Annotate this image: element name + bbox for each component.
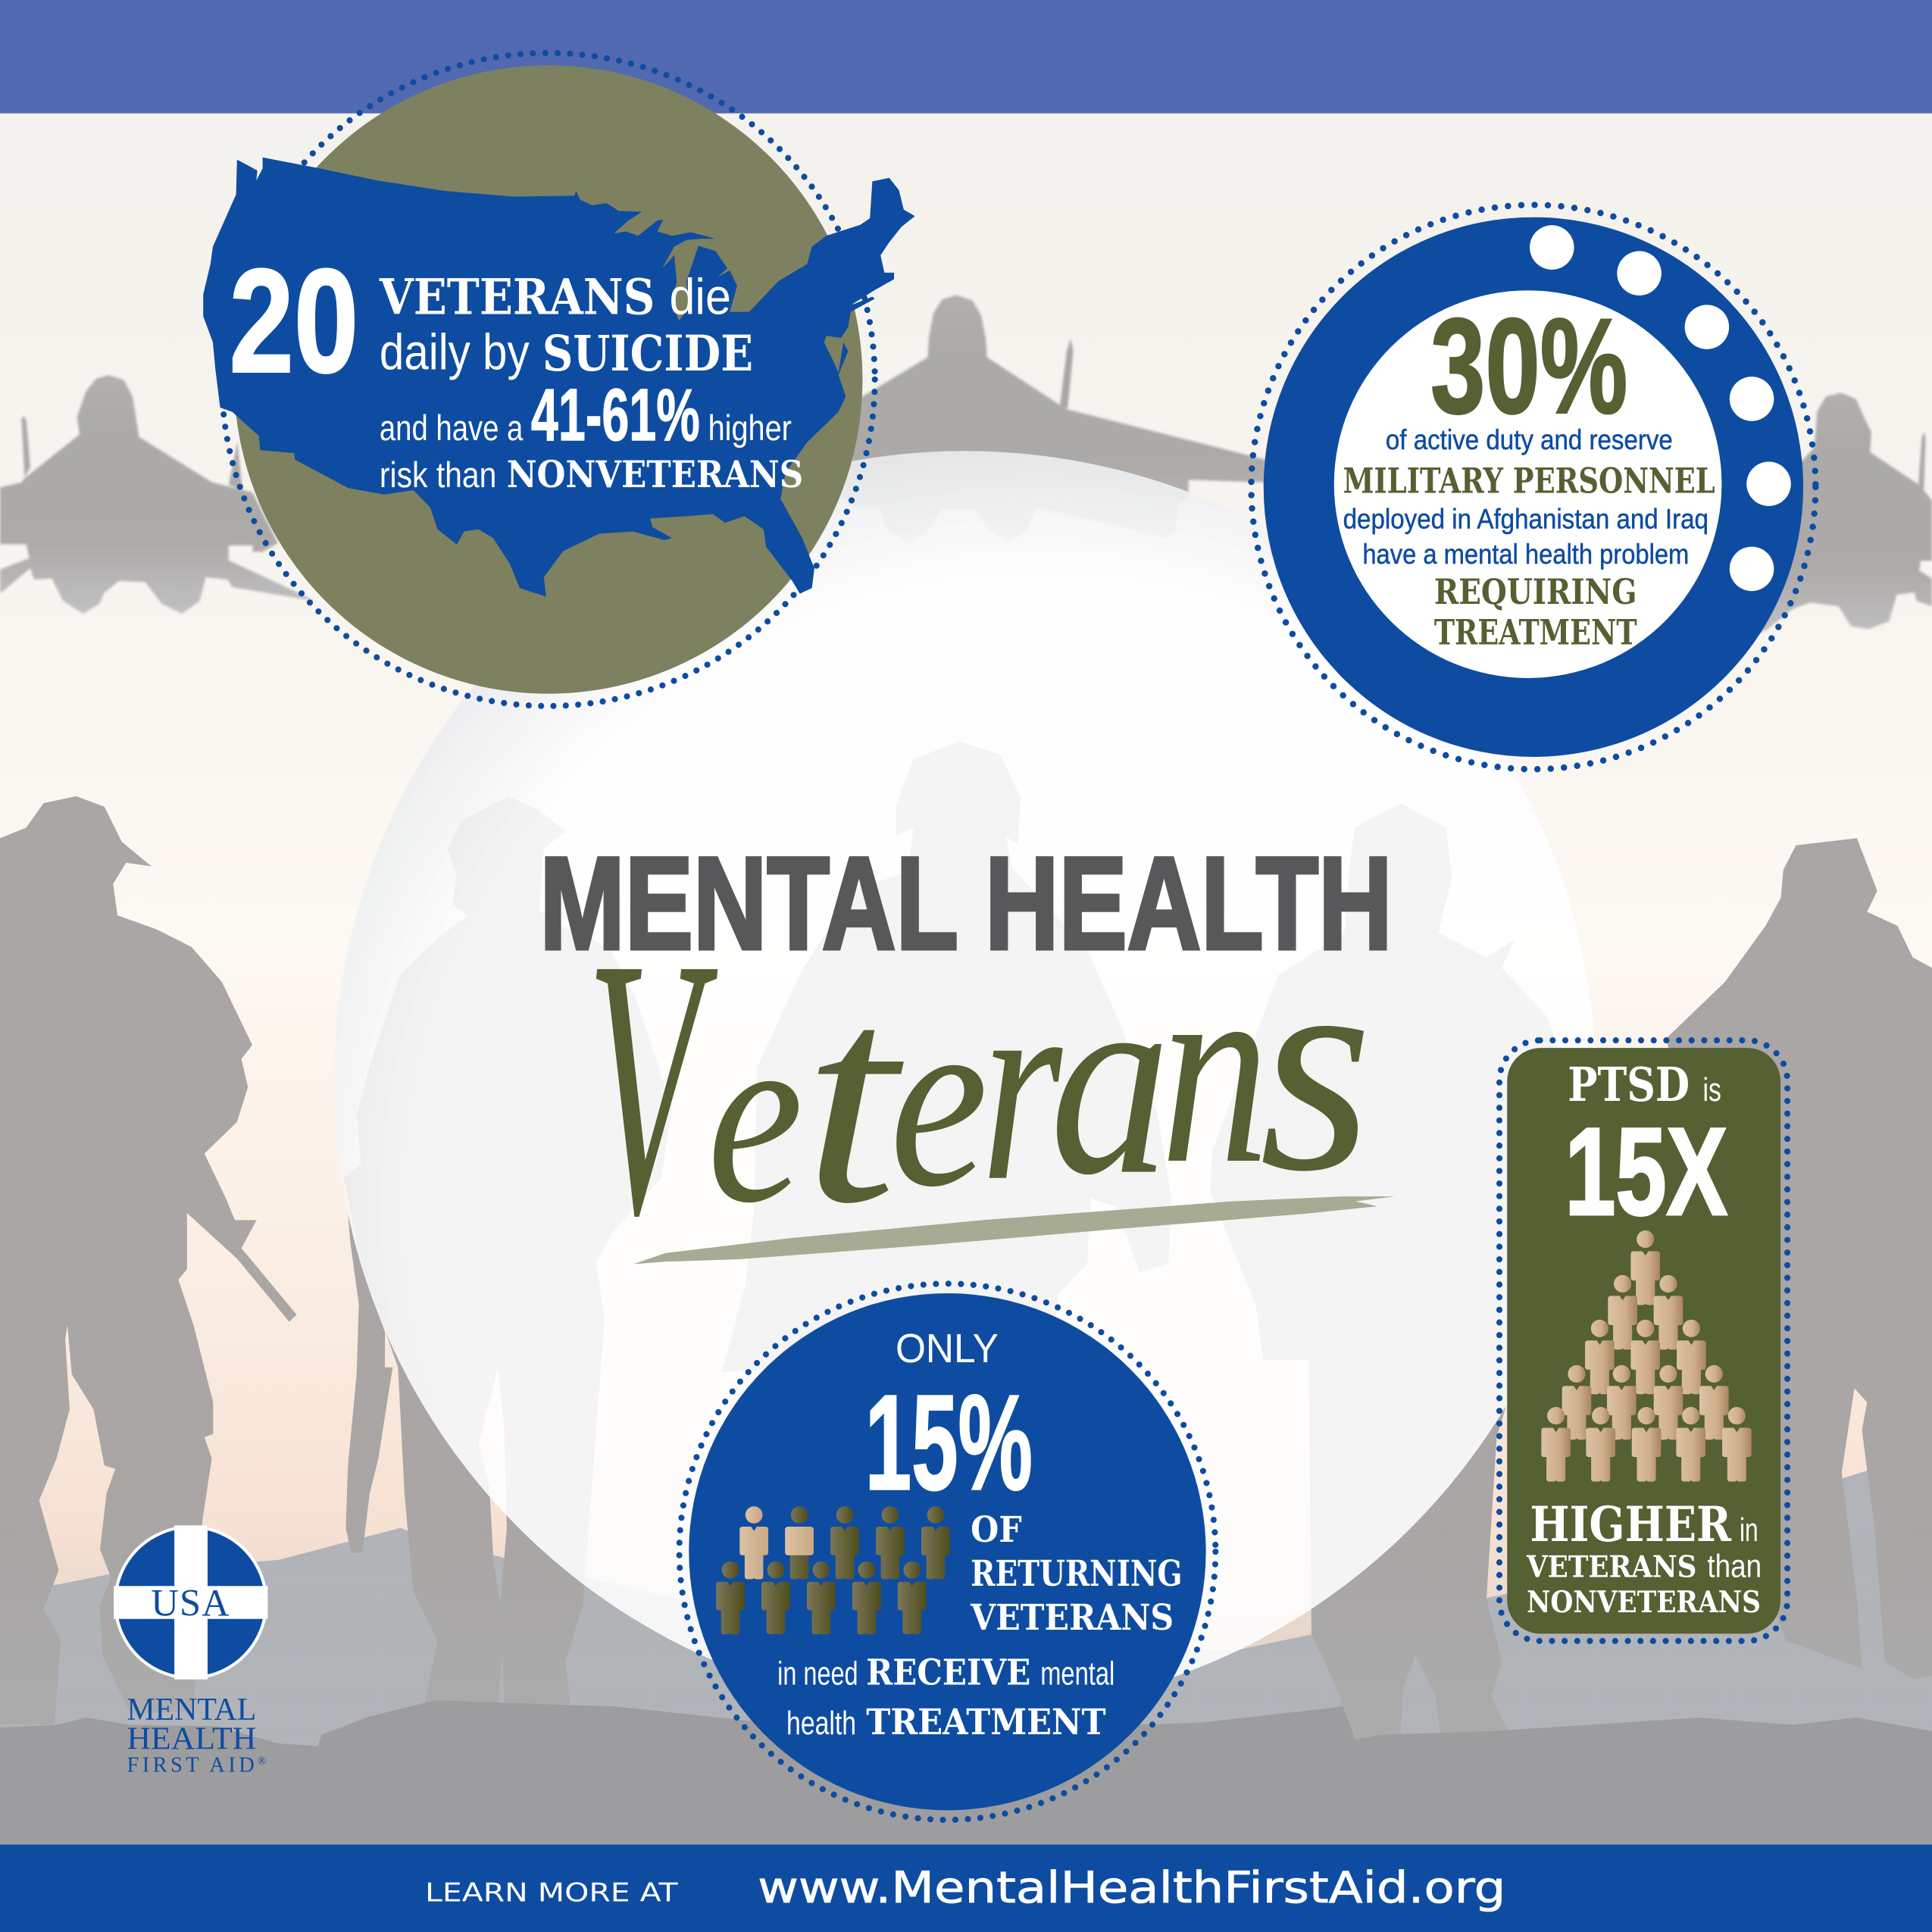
statistic: 15%: 15% [865, 1367, 1033, 1518]
text: higher in veterans than nonveterans: than [1707, 1548, 1762, 1583]
title: veterans script: a [1050, 929, 1171, 1232]
text: of returning veterans: RETURNING [971, 1553, 1183, 1595]
title: mental health: MENTAL HEALTH [539, 829, 1393, 977]
text: higher in veterans than nonveterans: in [1740, 1512, 1758, 1549]
text: higher in veterans than nonveterans [1526, 1496, 1762, 1620]
panel: 30 percent [1251, 205, 1815, 769]
text: in need receive mental health treatment: in need [777, 1655, 858, 1693]
text: of returning veterans: VETERANS [970, 1597, 1174, 1639]
logo: Mental Health First Aid USA: FIRST AID [127, 1753, 255, 1777]
white progress dots [1530, 225, 1791, 591]
distant mountains [0, 1469, 1932, 1845]
foreground ridge [0, 1700, 1932, 1845]
statistic: 30%: 30% [1430, 290, 1627, 442]
top band [0, 0, 1932, 114]
text: veterans die daily by suicide [379, 269, 803, 496]
footer text: learn more at: LEARN MORE AT [425, 1877, 678, 1908]
text: higher in veterans than nonveterans: VETERANS [1526, 1549, 1696, 1584]
icon: pyramid of people [1541, 1230, 1752, 1482]
footer text: website: www.MentalHealthFirstAid.org [758, 1863, 1505, 1913]
text: higher in veterans than nonveterans: NONVETERANS [1527, 1585, 1761, 1620]
title: veterans script: V [586, 882, 720, 1292]
soldier 2 and rifle [344, 796, 672, 1707]
text: veterans die daily by suicide: die [670, 270, 731, 326]
logo: Mental Health First Aid USA: HEALTH [127, 1721, 256, 1756]
logo: Mental Health First Aid USA: ® [258, 1755, 266, 1768]
text: higher in veterans than nonveterans: HIGHER [1530, 1496, 1732, 1552]
text: military personnel description: of active duty and reserve [1386, 424, 1673, 455]
title: veterans script: r [981, 932, 1066, 1239]
large white central circle [334, 451, 1596, 1713]
text: in need receive mental health treatment [777, 1652, 1114, 1743]
text: PTSD is: is [1703, 1071, 1721, 1108]
text: in need receive mental health treatment: mental [1040, 1655, 1114, 1693]
text: veterans die daily by suicide: NONVETERANS [507, 452, 803, 496]
title: veterans script: s [1259, 900, 1373, 1234]
soldier 5 [1667, 838, 1932, 1679]
title: veterans script: t [803, 932, 908, 1266]
statistic: 15X: 15X [1565, 1102, 1727, 1241]
text: of returning veterans: OF [971, 1509, 1022, 1551]
title: veterans script: e [889, 960, 988, 1240]
panel: 20 veterans [203, 53, 914, 706]
text: military personnel description: REQUIRING [1434, 571, 1637, 612]
text: in need receive mental health treatment: RECEIVE [866, 1652, 1030, 1694]
soldier 4 [1210, 803, 1578, 1739]
statistic: 20: 20 [229, 239, 358, 404]
brush underline [633, 1196, 1395, 1265]
soldier 3 [722, 742, 1171, 1372]
soldiers silhouettes [0, 742, 1932, 1739]
panel: only 15 percent [680, 1283, 1215, 1820]
text: veterans die daily by suicide: VETERANS [379, 269, 655, 327]
text: veterans die daily by suicide: and have a [380, 408, 524, 448]
soldier 1 [0, 796, 297, 1724]
text: veterans die daily by suicide: 41-61% [531, 374, 700, 456]
title: veterans script: e [707, 976, 803, 1255]
text: of returning veterans [970, 1509, 1183, 1639]
text: military personnel description: deployed in Afghanistan and Iraq [1343, 503, 1708, 535]
text: veterans die daily by suicide: SUICIDE [542, 325, 753, 383]
text: military personnel description: MILITARY PERSONNEL [1343, 461, 1715, 502]
logo: Mental Health First Aid USA [114, 1525, 267, 1777]
icon: group of ten people [716, 1506, 950, 1634]
text: only: ONLY [896, 1326, 999, 1371]
text: in need receive mental health treatment: health [786, 1705, 856, 1742]
footer band [0, 1845, 1932, 1932]
title: veterans script: n [1161, 918, 1269, 1221]
text: PTSD is: PTSD [1568, 1057, 1690, 1112]
text: military personnel description [1343, 424, 1715, 653]
text: in need receive mental health treatment: TREATMENT [866, 1702, 1106, 1743]
map of the United States [203, 158, 914, 597]
text: veterans die daily by suicide: daily by [380, 324, 530, 380]
logo: Mental Health First Aid USA: MENTAL [127, 1692, 256, 1727]
mist over lower soldiers [0, 1528, 1932, 1737]
text: military personnel description: have a mental health problem [1362, 538, 1689, 570]
jets silhouettes [0, 295, 1932, 642]
text: veterans die daily by suicide: risk than [380, 455, 496, 495]
logo: Mental Health First Aid USA: USA [151, 1582, 230, 1624]
text: veterans die daily by suicide: higher [708, 408, 792, 448]
text: military personnel description: TREATMENT [1434, 612, 1637, 653]
panel: PTSD 15X [1499, 1040, 1787, 1641]
